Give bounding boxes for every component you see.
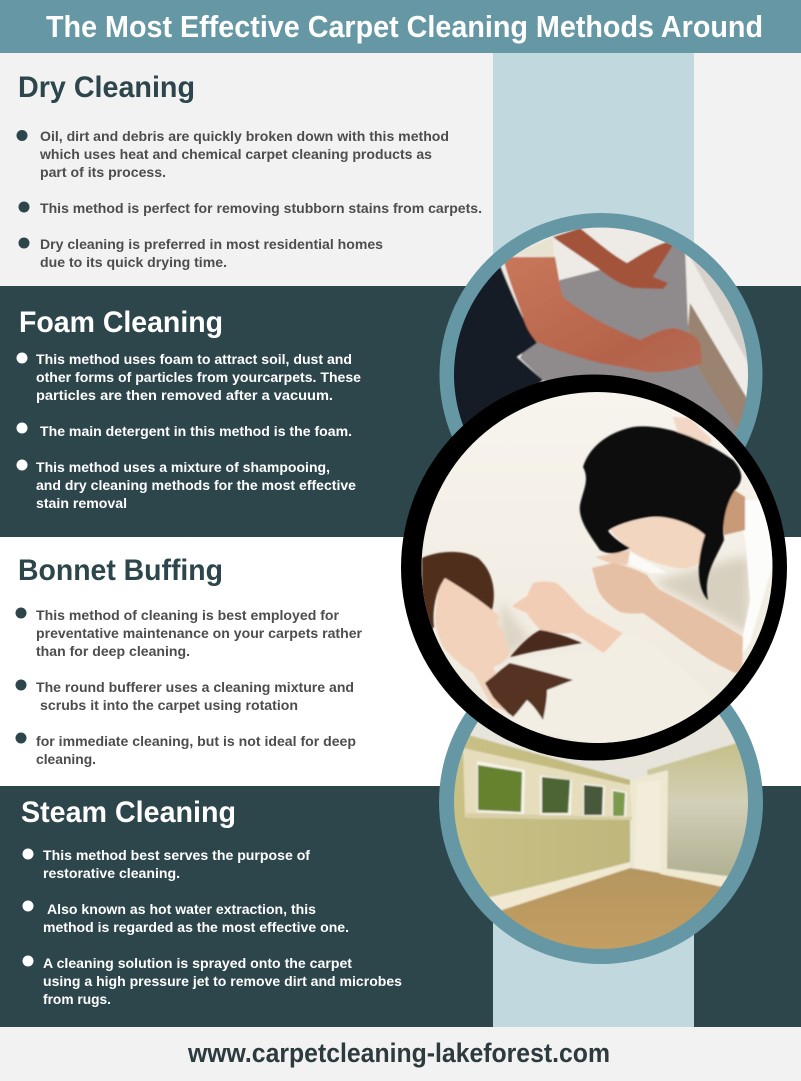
list: dry cleaning points: which uses heat and chemical carpet cleaning products as	[39, 146, 432, 162]
list: dry cleaning points: This method is perfect for removing stubborn stains from carpets.	[40, 200, 482, 216]
list: bonnet buffing points: The round bufferer uses a cleaning mixture and	[36, 679, 354, 695]
list: bonnet buffing points: This method of cleaning is best employed for	[36, 607, 340, 623]
list: dry cleaning points: part of its process.	[40, 164, 166, 180]
list: steam cleaning points: This method best serves the purpose of	[43, 847, 310, 863]
list: steam cleaning points: from rugs.	[43, 991, 111, 1007]
list: steam cleaning points	[22, 847, 402, 1007]
foam cleaning section	[16, 306, 361, 511]
upper woman face	[610, 517, 711, 568]
photo: hands laying carpet	[440, 213, 762, 448]
list: bonnet buffing points: cleaning.	[36, 751, 96, 767]
heading: bonnet buffing: Bonnet Buffing	[18, 554, 223, 587]
panel: dry cleaning background	[0, 53, 801, 286]
list: foam cleaning points: particles are then removed after a vacuum.	[36, 387, 333, 403]
list: steam cleaning points: using a high pressure jet to remove dirt and microbes	[43, 973, 402, 989]
footer url: www.carpetcleaning-lakeforest.com	[187, 1038, 610, 1068]
list: foam cleaning points: This method uses a mixture of shampooing,	[36, 459, 330, 475]
list: foam cleaning points: The main detergent in this method is the foam.	[40, 423, 352, 439]
header banner	[0, 0, 801, 53]
photo: carpeted room with windows	[439, 704, 763, 964]
list: steam cleaning points: method is regarded as the most effective one.	[43, 919, 349, 935]
dry cleaning section	[16, 71, 482, 270]
list: foam cleaning points: and dry cleaning methods for the most effective	[36, 477, 356, 493]
title: The Most Effective Carpet Cleaning Methods Around	[46, 9, 763, 44]
list: dry cleaning points: Dry cleaning is preferred in most residential homes	[40, 236, 383, 252]
list: dry cleaning points: due to its quick drying time.	[40, 254, 227, 270]
lower woman hair	[422, 552, 494, 640]
list: bonnet buffing points: preventative maintenance on your carpets rather	[36, 625, 363, 641]
heading: dry cleaning: Dry Cleaning	[18, 71, 195, 104]
lower woman sweater	[509, 662, 710, 743]
vertical pale blue column	[493, 53, 694, 1027]
steam cleaning section	[21, 796, 402, 1007]
heading: foam cleaning: Foam Cleaning	[19, 306, 223, 339]
upper woman arm	[592, 563, 743, 675]
photo: two women lying on white carpet	[401, 374, 787, 760]
list: bonnet buffing points: than for deep cleaning.	[36, 643, 190, 659]
list: foam cleaning points	[16, 351, 361, 511]
footer bar	[0, 1027, 801, 1081]
upper woman hair	[580, 426, 741, 600]
list: bonnet buffing points: scrubs it into the carpet using rotation	[40, 697, 298, 713]
panel: steam cleaning background	[0, 786, 801, 1027]
list: bonnet buffing points	[16, 607, 363, 767]
lower woman hand	[513, 582, 623, 653]
list: foam cleaning points: other forms of particles from yourcarpets. These	[36, 369, 361, 385]
upper woman sleeve	[742, 500, 772, 653]
list: dry cleaning points	[16, 128, 482, 270]
heading: steam cleaning: Steam Cleaning	[21, 796, 236, 829]
list: steam cleaning points: A cleaning solution is sprayed onto the carpet	[43, 955, 352, 971]
lower woman face	[435, 573, 513, 713]
list: foam cleaning points: stain removal	[36, 495, 127, 511]
list: foam cleaning points: This method uses foam to attract soil, dust and	[36, 351, 352, 367]
panel: bonnet buffing background	[0, 537, 801, 786]
list: steam cleaning points: Also known as hot water extraction, this	[47, 901, 316, 917]
list: steam cleaning points: restorative cleaning.	[43, 865, 180, 881]
bonnet buffing section	[16, 554, 363, 767]
panel: foam cleaning background	[0, 286, 801, 537]
list: bonnet buffing points: for immediate cleaning, but is not ideal for deep	[36, 733, 356, 749]
list: dry cleaning points: Oil, dirt and debris are quickly broken down with this method	[40, 128, 449, 144]
